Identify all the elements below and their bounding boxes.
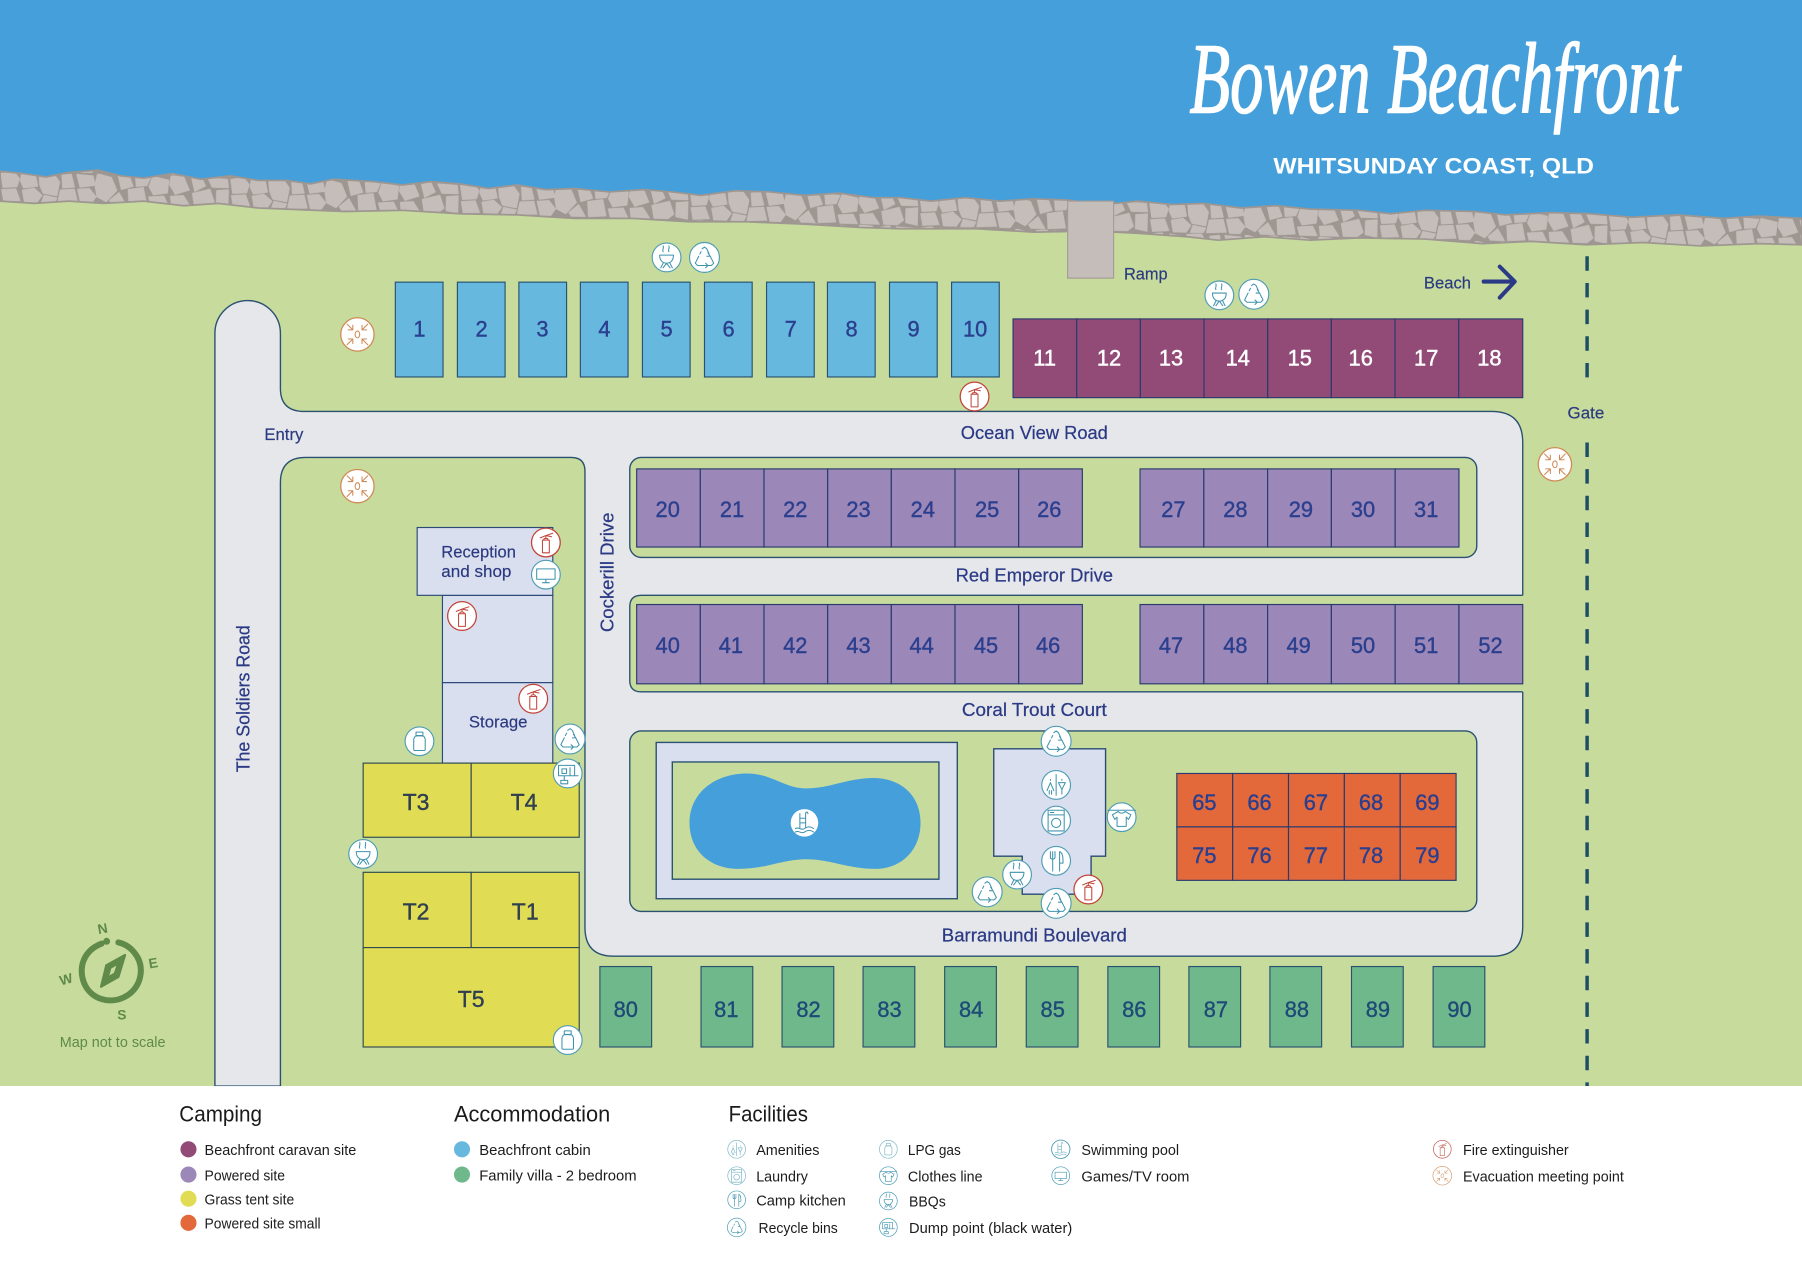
map icons [341,242,1572,1054]
building: storage: Storage [469,712,527,731]
villa 82 [782,967,834,1047]
label: Gate: Gate [1568,403,1604,422]
note: map not to scale: Map not to scale [60,1035,165,1051]
site 22 [764,469,828,547]
site 30 [1331,469,1395,547]
villa 90: 90 [1447,997,1472,1022]
powered sites 40-52 [637,605,1523,684]
key: games TV room: Games/TV room [1081,1169,1189,1185]
building: camp kitchen and amenities [994,749,1106,894]
compass south: S [117,1007,126,1022]
site 14: 14 [1226,345,1250,370]
site T3: T3 [403,789,429,815]
icon: fire extinguisher mid block [448,602,476,630]
site 69 [1400,773,1456,827]
icon: recycle top of amenities [1041,726,1071,756]
site 77: 77 [1304,843,1328,868]
site 44 [891,605,955,684]
key: amenities [728,1140,819,1159]
compass dot [103,938,110,945]
site T2: T2 [403,898,429,924]
cabin 5 [642,282,690,377]
villa 87: 87 [1204,997,1228,1022]
key: games TV room [1052,1167,1189,1185]
villa 81 [701,967,753,1047]
building: reception and shop: and shop [441,562,511,581]
icon: fire extinguisher at reception [532,528,560,557]
label: Red Emperor Drive: Red Emperor Drive [956,565,1113,586]
site 27: 27 [1161,497,1186,522]
grass ground [0,190,1802,1086]
key: dump point: Dump point (black water) [909,1221,1072,1237]
gate fence south [1586,442,1589,1086]
compass [58,921,159,1022]
heading: Accommodation: Accommodation [454,1102,610,1127]
site 11 [1013,319,1077,398]
villa 86: 86 [1122,997,1146,1022]
site 18: 18 [1477,345,1502,370]
villa 89: 89 [1366,997,1390,1022]
compass ring [82,942,141,1000]
cabin 5: 5 [660,317,673,342]
site 26: 26 [1037,497,1061,522]
building: storage [442,683,553,763]
site T5 [363,948,579,1047]
cabin 8 [827,282,875,377]
key: BBQs: BBQs [909,1195,946,1211]
site 52 [1459,605,1523,684]
legend: camping [179,1102,356,1233]
site T2 [363,872,471,948]
building: middle block [442,595,553,683]
site 16 [1331,319,1395,398]
pool water [690,773,921,869]
subtitle: WHITSUNDAY COAST, QLD [1273,154,1594,179]
rock seawall [0,170,1802,246]
site 41 [700,605,764,684]
sea [0,0,1802,299]
icon: evacuation point at gate [1538,448,1572,481]
heading: Camping: Camping [179,1102,262,1127]
site 68: 68 [1359,790,1383,815]
road network [215,301,1523,1086]
icon: fire extinguisher at storage [519,684,548,713]
cabin 7: 7 [785,317,797,342]
site 13: 13 [1159,345,1183,370]
site 77 [1289,827,1344,880]
pool lawn [672,762,939,879]
site 78: 78 [1359,843,1383,868]
site T5: T5 [458,986,485,1012]
villa 82: 82 [796,997,821,1022]
site 76 [1233,827,1289,880]
swimming pool area [656,742,957,899]
cabin 4 [580,282,628,377]
key: BBQs [879,1192,946,1211]
key: recycle bins: Recycle bins [758,1221,838,1237]
site T3 [363,763,471,837]
key: laundry [728,1167,809,1185]
key: LPG gas: LPG gas [908,1143,961,1159]
villa 81: 81 [714,997,738,1022]
site 43 [828,605,891,684]
compass needle [101,955,125,987]
key: laundry: Laundry [756,1169,809,1185]
site 17: 17 [1414,345,1438,370]
site 21: 21 [720,497,744,522]
site 49 [1268,605,1331,684]
compass west: W [58,971,74,988]
site 51 [1395,605,1459,684]
cabin 1: 1 [413,317,426,342]
site 67 [1289,773,1344,827]
villa 88 [1270,967,1322,1047]
label: Coral Trout Court: Coral Trout Court [962,699,1107,720]
site 29 [1268,469,1331,547]
site 69: 69 [1415,790,1439,815]
site 23 [828,469,891,547]
icon: BBQ at tents [349,840,378,868]
icon: clothes line [1107,803,1136,832]
villa 85 [1026,967,1078,1047]
icon: games TV room [532,560,560,589]
island: pool and amenities [630,731,1477,911]
villa 83 [863,967,915,1047]
icon: laundry [1042,806,1071,835]
site 15 [1268,319,1331,398]
gate fence north [1586,256,1589,378]
site 13 [1140,319,1204,398]
key: amenities: Amenities [756,1143,819,1159]
villa 84 [945,967,996,1047]
cabin 2: 2 [475,317,488,342]
key: clothes line [879,1167,983,1185]
key: camp kitchen: Camp kitchen [756,1194,846,1210]
site 66 [1233,773,1289,827]
key: recycle bins [727,1218,838,1237]
site 28 [1204,469,1268,547]
site 25: 25 [975,497,999,522]
site 28: 28 [1223,497,1248,522]
key: evacuation meeting point: Evacuation meeting point [1463,1169,1624,1185]
beachfront cabins 1-10 [395,282,999,377]
site 24: 24 [911,497,935,522]
icon: BBQ near cabin 5 [652,243,681,272]
key: swimming pool [1052,1140,1179,1159]
villa 87 [1189,967,1241,1047]
label: Ocean View Road: Ocean View Road [961,422,1108,443]
label: Entry: Entry [264,425,304,444]
site 79: 79 [1415,843,1439,868]
powered sites 20-31 [637,469,1459,547]
key: swimming pool: Swimming pool [1081,1143,1179,1159]
cabin 3 [519,282,567,377]
villa 85: 85 [1041,997,1065,1022]
powered small sites 65-79 [1177,773,1456,880]
site 78 [1344,827,1400,880]
site 75: 75 [1192,843,1217,868]
key: powered site small: Powered site small [205,1217,321,1233]
site T1: T1 [512,898,539,924]
site 48 [1204,605,1268,684]
site 65 [1177,773,1233,827]
key: grass tent site [180,1191,294,1208]
icon: recycle at storage [555,724,585,754]
site 17 [1395,319,1459,398]
cabin 3: 3 [536,317,549,342]
site 66: 66 [1247,790,1272,815]
cabin 9 [890,282,937,377]
key: clothes line: Clothes line [908,1169,983,1185]
villa 86 [1108,967,1160,1047]
building: reception and shop [417,528,553,595]
site 47: 47 [1159,633,1183,658]
site 26 [1019,469,1082,547]
road labels [232,264,1604,945]
legend: accommodation [454,1102,637,1184]
site 18 [1459,319,1523,398]
island: Coral Trout north [630,595,1525,692]
site 20 [637,469,700,547]
legend: facilities [727,1102,1624,1237]
villa 80 [600,967,652,1047]
cabin 6: 6 [723,317,735,342]
site 40: 40 [656,633,680,658]
key: beachfront cabin: Beachfront cabin [479,1143,591,1159]
heading: Facilities: Facilities [729,1102,808,1127]
icon: LPG gas at T3 [405,727,434,756]
icon: camp kitchen [1042,846,1071,875]
label: Ramp: Ramp [1124,264,1168,283]
label: The Soldiers Road: The Soldiers Road [232,625,253,772]
arrow: to beach [1484,267,1515,298]
site 46 [1019,605,1082,684]
site 79 [1400,827,1456,880]
site 21 [700,469,764,547]
icon: recycle bottom of kitchen [1041,888,1071,918]
site 68 [1344,773,1400,827]
icon: evacuation point north [341,318,374,351]
site 50 [1331,605,1395,684]
cabin 10: 10 [963,317,987,342]
site 11: 11 [1033,345,1056,370]
key: powered site [180,1167,285,1184]
key: grass tent site: Grass tent site [205,1192,294,1208]
site 40 [637,605,700,684]
icon: fire extinguisher at cabin 10 [960,382,989,411]
site 51: 51 [1414,633,1438,658]
site T4 [471,763,579,837]
site 29: 29 [1289,497,1313,522]
key: fire extinguisher [1433,1140,1569,1159]
key: LPG gas [879,1140,961,1159]
villa 83: 83 [877,997,902,1022]
site 31: 31 [1414,497,1438,522]
grass tent sites [363,763,579,1047]
site 16: 16 [1349,345,1373,370]
compass east: E [147,955,159,971]
cabin 9: 9 [908,317,920,342]
key: beachfront caravan site: Beachfront caravan site [205,1143,356,1159]
key: camp kitchen [728,1191,846,1210]
island outline: Coral Trout north [630,595,1523,692]
icon: BBQ near site 14 [1205,281,1234,310]
site 45 [955,605,1019,684]
site 30: 30 [1351,497,1375,522]
icon: LPG gas at T5 [553,1026,582,1054]
island: Red Emperor north [630,457,1477,557]
site 46: 46 [1036,633,1060,658]
villa 90 [1433,967,1485,1047]
site 23: 23 [846,497,871,522]
site 14 [1204,319,1268,398]
site 52: 52 [1478,633,1503,658]
site 27 [1140,469,1204,547]
villa 88: 88 [1285,997,1309,1022]
key: family villa: Family villa - 2 bedroom [479,1168,637,1184]
icon: recycle near cabin 6 [690,242,719,272]
villa 80: 80 [614,997,638,1022]
site 45: 45 [974,633,998,658]
villa 89 [1352,967,1403,1047]
site 20: 20 [656,497,680,522]
site 15: 15 [1288,345,1312,370]
cabin 2 [457,282,505,377]
icon: BBQ at camp kitchen [1003,860,1031,889]
building: reception and shop: Reception [441,542,516,561]
cabin 10 [952,282,999,377]
site 76: 76 [1247,843,1272,868]
site 67: 67 [1304,790,1328,815]
label: Cockerill Drive: Cockerill Drive [597,513,618,632]
site 49: 49 [1286,633,1311,658]
site 22: 22 [783,497,807,522]
site 43: 43 [846,633,871,658]
site 24 [891,469,955,547]
icon: recycle near site 14 [1239,279,1269,309]
site 41: 41 [719,633,743,658]
cabin 4: 4 [598,317,611,342]
cabin 8: 8 [846,317,858,342]
buildings: reception and storage [417,528,553,763]
icon: swimming pool [791,809,818,837]
label: Barramundi Boulevard: Barramundi Boulevard [942,924,1127,945]
villa 84: 84 [959,997,983,1022]
cabin 1 [395,282,443,377]
site 50: 50 [1351,633,1375,658]
site 25 [955,469,1019,547]
site T4: T4 [511,789,538,815]
pool surround [656,742,957,899]
site T1 [471,872,579,948]
site 31 [1395,469,1459,547]
icon: dump point [553,759,582,788]
key: powered site: Powered site [205,1168,285,1184]
cabin 6 [704,282,752,377]
site 42 [764,605,828,684]
icon: fire extinguisher at kitchen [1074,875,1103,904]
icon: recycle left of kitchen [972,877,1002,907]
icon: amenities [1042,771,1071,799]
label: Beach: Beach [1424,273,1471,292]
icon: evacuation point at reception [341,469,374,503]
boat ramp [1068,201,1114,278]
site 12 [1077,319,1140,398]
family villas 80-90 [600,967,1485,1047]
site 65: 65 [1192,790,1217,815]
cabin 7 [767,282,814,377]
key: fire extinguisher: Fire extinguisher [1463,1143,1569,1159]
site 42: 42 [783,633,807,658]
legend panel background [0,1086,1802,1268]
compass north: N [96,921,109,937]
site 47 [1140,605,1204,684]
beachfront caravan sites 11-18 [1013,319,1523,398]
site 48: 48 [1223,633,1248,658]
site 75 [1177,827,1233,880]
site 44: 44 [910,633,934,658]
site 12: 12 [1097,345,1121,370]
